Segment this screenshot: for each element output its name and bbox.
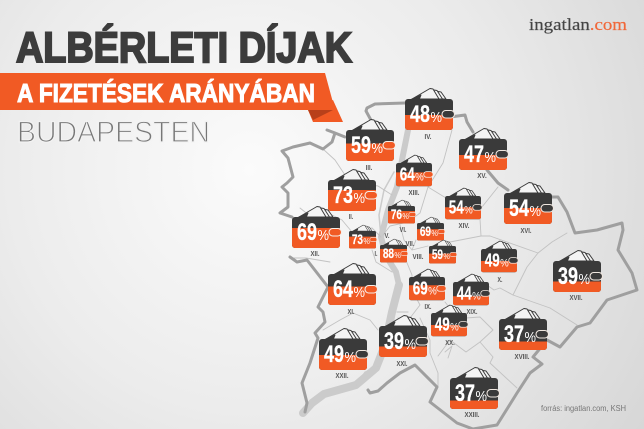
wallet XXII: %: [344, 349, 356, 366]
wallet XIV: %: [464, 204, 473, 216]
district labels: XI.: [348, 307, 354, 316]
title: ALBÉRLETI DÍJAK: [16, 24, 352, 72]
wallet XII: 69: [297, 219, 317, 246]
wallet XIII: [396, 155, 433, 186]
wallet XIX: 44: [457, 283, 472, 303]
district labels: XIII.: [408, 188, 420, 197]
wallet V: %: [402, 211, 409, 221]
wallet I: 73: [352, 232, 363, 247]
wallet III: %: [372, 140, 383, 157]
wallet IX: 69: [413, 278, 428, 298]
district labels: XV.: [477, 171, 487, 180]
wallet III: [346, 120, 396, 161]
wallet IV: [405, 88, 454, 130]
wallet XXI: 39: [384, 328, 404, 355]
wallet XIX: %: [472, 290, 481, 302]
wallet II: [328, 170, 378, 211]
wallet II: 73: [333, 182, 353, 209]
district labels: V.: [384, 231, 390, 240]
wallet VI: 69: [420, 224, 431, 239]
wallet XVI: %: [530, 203, 541, 220]
wallet XXII: [319, 328, 368, 370]
wallet VII: 88: [383, 246, 394, 261]
ribbon: [0, 73, 343, 122]
district labels: IV.: [424, 132, 432, 141]
wallet VI: [417, 217, 445, 240]
wallet XVII: 39: [558, 263, 578, 290]
district labels: VI.: [400, 225, 406, 234]
city border: [280, 103, 637, 429]
wallet XV: 47: [464, 141, 484, 168]
wallet IX: %: [428, 285, 437, 297]
district labels: X.: [498, 275, 502, 284]
wallet XXI: %: [404, 336, 416, 353]
wallet XIX: [453, 274, 490, 305]
district labels: III.: [366, 163, 372, 172]
wallet VI: %: [431, 228, 438, 238]
wallet XXIII: [450, 368, 500, 409]
wallet XV: %: [484, 149, 496, 166]
wallet I: %: [363, 236, 370, 246]
wallet XI: 64: [333, 276, 353, 303]
source: forrás: ingatlan.com, KSH: [541, 404, 626, 413]
river Danube: [303, 130, 408, 413]
map of Budapest: [280, 103, 637, 429]
district labels: XX.: [445, 338, 455, 347]
district labels: XII.: [310, 249, 320, 258]
wallet I: [349, 225, 377, 248]
wallet VII: %: [394, 250, 401, 260]
district labels: XXI.: [396, 359, 408, 368]
wallet VIII: %: [443, 251, 450, 261]
subtitle: A FIZETÉSEK ARÁNYÁBAN: [17, 78, 315, 108]
district labels: XVI.: [520, 226, 532, 235]
district labels: VIII.: [412, 252, 424, 261]
district boundaries: [292, 130, 577, 388]
district labels: XIV.: [458, 221, 470, 230]
wallet XVIII: 37: [504, 321, 524, 348]
district labels: XXII.: [336, 371, 348, 380]
district labels: VII.: [406, 239, 414, 248]
wallet X: %: [500, 257, 509, 269]
wallet X: 49: [485, 250, 500, 270]
wallet XIII: 64: [400, 164, 415, 184]
wallet VIII: 59: [432, 247, 443, 262]
wallet V: [388, 200, 416, 223]
district labels: IX.: [424, 302, 432, 311]
district labels: XIX.: [466, 307, 478, 316]
wallet V: 76: [391, 207, 402, 222]
wallet XVII: [553, 250, 602, 292]
wallet XXI: [379, 316, 428, 357]
wallet XII: [292, 206, 342, 248]
district labels: XVII.: [570, 293, 582, 302]
wallet XVI: [504, 182, 554, 224]
wallet XX: %: [450, 321, 459, 333]
wallet II: %: [354, 190, 365, 207]
wallet XIII: %: [415, 171, 424, 183]
district labels: XXIII.: [464, 410, 480, 419]
district labels: II.: [349, 212, 353, 221]
wallet IV: %: [430, 109, 442, 126]
wallet VII: [380, 239, 408, 262]
wallet XIV: [445, 188, 482, 219]
wallet XII: %: [318, 227, 329, 244]
wallet XXII: 49: [324, 341, 344, 368]
heading: Budapesten: BUDAPESTEN: [17, 116, 210, 149]
wallet XI: [328, 264, 378, 305]
wallet VIII: [429, 240, 457, 263]
wallet IX: [409, 269, 446, 300]
wallet III: 59: [351, 132, 371, 159]
district labels: XVIII.: [514, 352, 530, 361]
wallet XX: 49: [435, 314, 450, 334]
district labels: [310, 132, 582, 419]
wallet XX: [431, 305, 468, 336]
wallet X: [481, 241, 518, 272]
wallet XI: %: [354, 284, 365, 301]
wallet XVI: 54: [509, 195, 529, 222]
wallet XV: [459, 128, 508, 170]
wallet XVIII: [499, 308, 548, 350]
logo: ingatlan .com: [529, 15, 627, 34]
wallet XVIII: %: [524, 329, 536, 346]
wallet IV: 48: [410, 101, 430, 128]
wallet XVII: %: [578, 271, 590, 288]
wallet XXIII: %: [476, 388, 487, 405]
wallet XXIII: 37: [455, 380, 475, 407]
district labels: I.: [374, 249, 378, 258]
wallet XIV: 54: [449, 197, 464, 217]
